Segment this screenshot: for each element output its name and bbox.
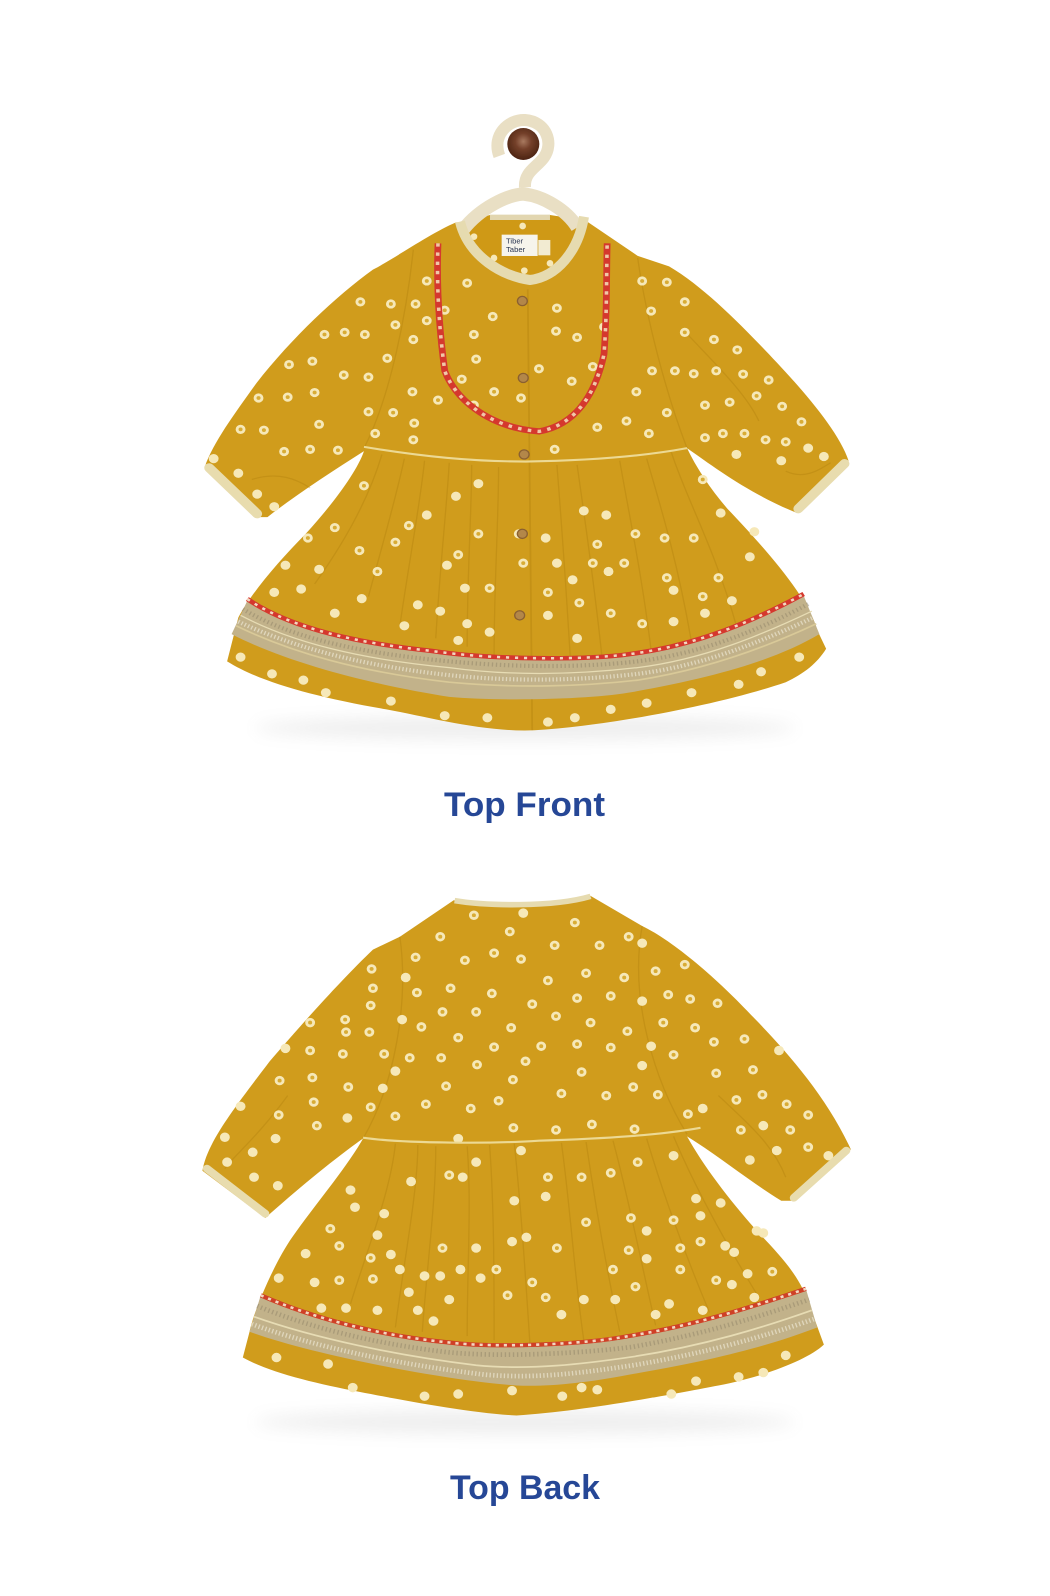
dress silhouette bbox=[202, 896, 851, 1416]
panel: back view of dress bbox=[202, 896, 851, 1416]
gold lace hem band bbox=[250, 1289, 817, 1386]
ground shadow front bbox=[255, 716, 795, 740]
brand label: Tiber bbox=[506, 236, 524, 245]
sleeve cuffs bbox=[207, 1151, 846, 1214]
red braid bib bbox=[438, 243, 607, 431]
sleeve cuffs bbox=[209, 464, 845, 514]
hanger shoulders bbox=[463, 194, 577, 229]
ground shadow back bbox=[255, 1410, 795, 1434]
caption: Top Back: Top Back bbox=[450, 1469, 600, 1507]
dress silhouette bbox=[205, 222, 849, 731]
dress front bbox=[205, 222, 849, 731]
caption: Top Front: Top Front bbox=[444, 786, 605, 824]
pleats and seams bbox=[225, 926, 786, 1345]
pleats and seams bbox=[252, 250, 831, 730]
front collar bbox=[460, 217, 584, 280]
hanger hook and knob bbox=[497, 120, 548, 187]
bandhani dots bbox=[225, 913, 828, 1396]
brand label bbox=[502, 235, 550, 256]
back neck trim bbox=[455, 896, 591, 905]
gold lace hem band bbox=[232, 594, 819, 699]
back collar bbox=[490, 209, 550, 225]
panel: front view of dress bbox=[205, 120, 849, 740]
inner neck dots bbox=[474, 226, 550, 271]
brand label: Taber bbox=[506, 245, 526, 254]
neckline interior and label bbox=[460, 194, 584, 280]
bandhani dots bbox=[214, 281, 824, 722]
waist piping bbox=[364, 447, 687, 462]
buttons bbox=[515, 296, 529, 620]
waist piping bbox=[363, 1128, 700, 1143]
